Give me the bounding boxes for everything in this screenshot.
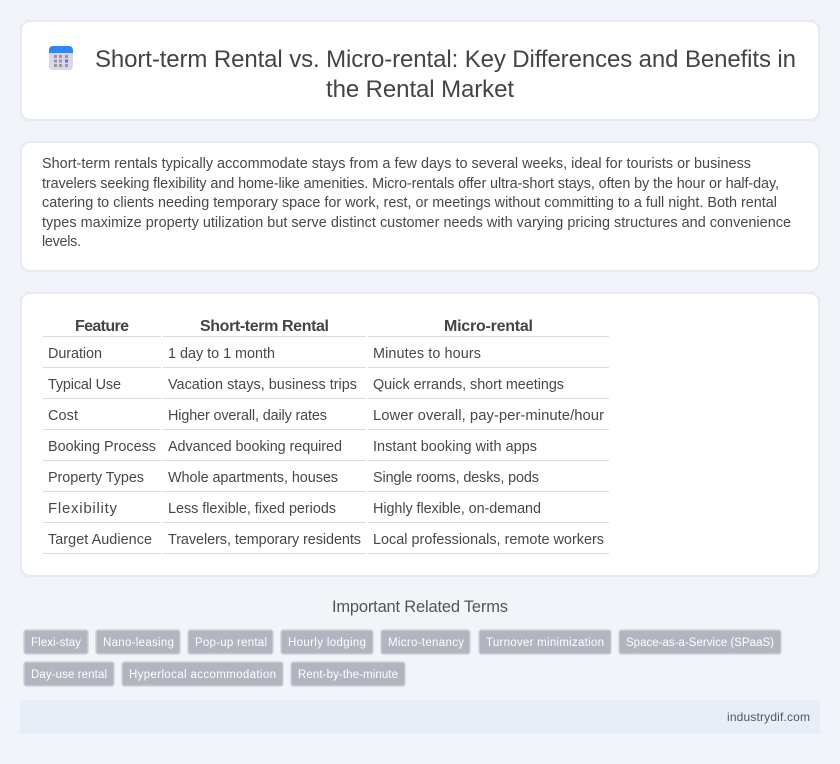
panel: comparison table xyxy=(21,293,819,576)
table header row: Short-term Rental xyxy=(200,318,329,335)
panel: introduction text: types maximize property utilization but serve distinct customer needs with varying pricing structures and convenience xyxy=(42,215,791,231)
row: cost: Lower overall, pay-per-minute/hour xyxy=(373,408,604,424)
tag: Nano-leasing xyxy=(96,630,180,654)
tag: Hyperlocal accommodation xyxy=(122,662,283,686)
row: typical use: Vacation stays, business trips xyxy=(168,377,357,393)
panel: introduction text: levels. xyxy=(42,234,81,250)
row: cost xyxy=(48,408,604,424)
heading: important related terms: Important Related Terms xyxy=(332,598,508,616)
tag: Day-use rental xyxy=(24,662,114,686)
row: duration xyxy=(48,346,481,362)
row: flexibility: Flexibility xyxy=(48,500,118,517)
footer xyxy=(20,700,820,734)
tag: Hyperlocal accommodation: Hyperlocal accommodation xyxy=(129,669,276,681)
panel: introduction text: travelers seeking flexibility and home-like amenities. Micro-rentals offer ultra-short stays, often by the hour or half-day, xyxy=(42,176,779,192)
row: target audience: Travelers, temporary residents xyxy=(168,532,361,548)
row: flexibility xyxy=(48,500,541,517)
row: flexibility: Less flexible, fixed periods xyxy=(168,501,336,517)
panel: introduction text: catering to clients needing temporary space for work, rest, or meetings without committing to a full night. Both rental xyxy=(42,195,777,211)
tag: Flexi-stay xyxy=(24,630,88,654)
table header row xyxy=(75,318,533,335)
panel: header xyxy=(21,21,819,120)
row: typical use: Quick errands, short meetings xyxy=(373,377,564,393)
row: property types: Whole apartments, houses xyxy=(168,470,338,486)
row: cost: Higher overall, daily rates xyxy=(168,408,327,424)
row: booking process: Advanced booking required xyxy=(168,439,342,455)
row: target audience: Target Audience xyxy=(48,532,152,548)
row: booking process: Instant booking with apps xyxy=(373,439,537,455)
tag: Space-as-a-Service (SPaaS): Space-as-a-Service (SPaaS) xyxy=(626,637,774,649)
related term tags xyxy=(24,630,781,686)
panel: introduction text: Short-term rentals typically accommodate stays from a few days to several weeks, ideal for tourists or business xyxy=(42,156,751,172)
title: the Rental Market xyxy=(326,76,514,103)
tag: Rent-by-the-minute: Rent-by-the-minute xyxy=(298,669,398,681)
tag: Micro-tenancy: Micro-tenancy xyxy=(388,637,464,649)
row: target audience xyxy=(48,532,604,548)
tag: Hourly lodging: Hourly lodging xyxy=(288,637,366,649)
row: typical use xyxy=(48,377,564,393)
row: duration: Duration xyxy=(48,346,102,362)
row: property types: Single rooms, desks, pods xyxy=(373,470,539,486)
row: duration: Minutes to hours xyxy=(373,346,481,362)
tag: Day-use rental: Day-use rental xyxy=(31,669,107,681)
title: Short-term Rental vs. Micro-rental: Key Differences and Benefits in xyxy=(95,46,796,73)
row: duration: 1 day to 1 month xyxy=(168,346,275,362)
title xyxy=(95,46,796,103)
row: cost: Cost xyxy=(48,408,78,424)
row: target audience: Local professionals, remote workers xyxy=(373,532,604,548)
table header row: Micro-rental xyxy=(444,318,533,335)
row: flexibility: Highly flexible, on-demand xyxy=(373,501,541,517)
row: property types: Property Types xyxy=(48,470,144,486)
row: property types xyxy=(48,470,539,486)
tag: Pop-up rental xyxy=(188,630,273,654)
tag: Pop-up rental: Pop-up rental xyxy=(195,637,267,649)
footer: industrydif.com xyxy=(727,710,810,724)
tag: Nano-leasing: Nano-leasing xyxy=(103,637,174,649)
tag: Micro-tenancy xyxy=(381,630,470,654)
row: booking process xyxy=(48,439,537,455)
row: booking process: Booking Process xyxy=(48,439,156,455)
tag: Rent-by-the-minute xyxy=(291,662,405,686)
table header row: Feature xyxy=(75,318,129,335)
row: typical use: Typical Use xyxy=(48,377,121,393)
tag: Turnover minimization xyxy=(479,630,611,654)
tag: Flexi-stay: Flexi-stay xyxy=(31,637,81,649)
tag: Turnover minimization: Turnover minimization xyxy=(486,637,604,649)
tag: Space-as-a-Service (SPaaS) xyxy=(619,630,781,654)
tag: Hourly lodging xyxy=(281,630,373,654)
icon: calendar xyxy=(49,46,73,70)
panel: introduction text xyxy=(21,142,819,271)
